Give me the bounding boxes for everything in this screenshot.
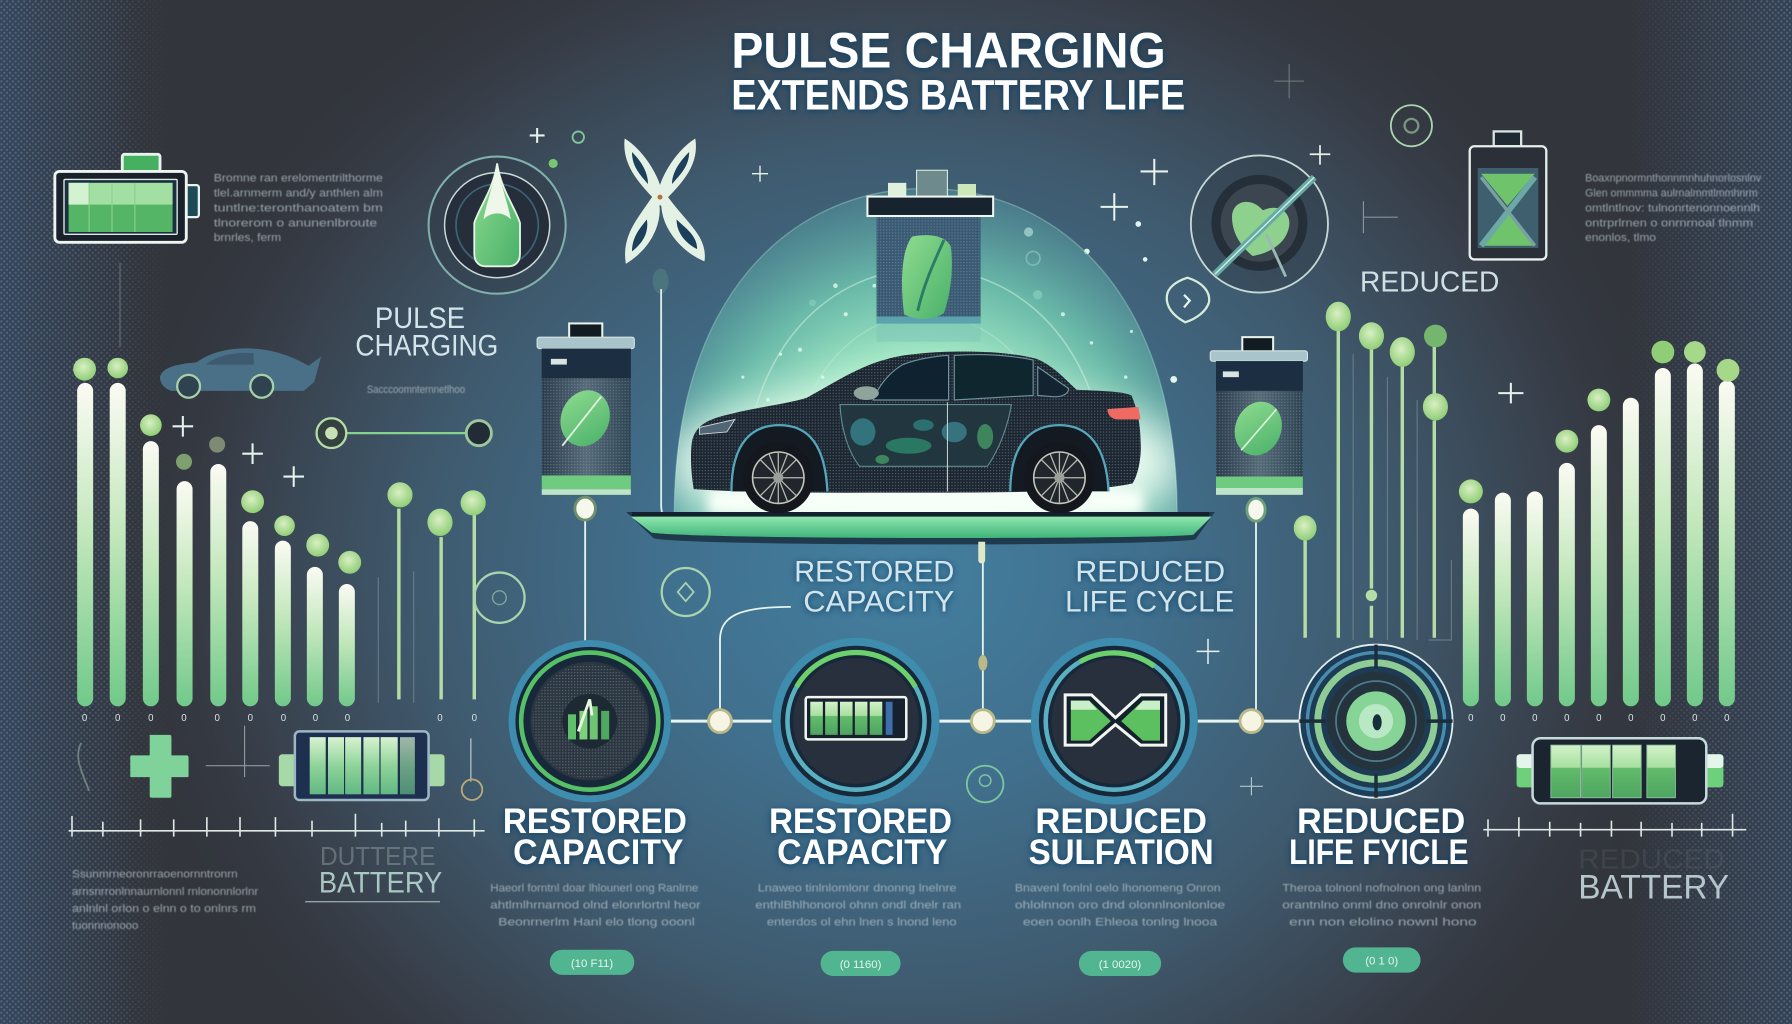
lights <box>1107 407 1141 419</box>
icon: heart with crossing wire <box>1191 155 1328 293</box>
left bar chart: 0 <box>313 713 319 724</box>
step 4 circle: target rings <box>1299 645 1453 798</box>
label: faded battery bottom-right <box>1578 844 1729 906</box>
node link <box>317 418 491 448</box>
step 1 circle: restored capacity <box>509 640 671 802</box>
text block: top-left description <box>214 173 383 244</box>
step 3 description <box>1015 882 1225 929</box>
right bar chart <box>1459 341 1739 724</box>
mid labels: restored capacity: RESTORED <box>794 556 954 589</box>
line from scissors to platform <box>653 269 704 534</box>
step 1 heading: CAPACITY <box>513 832 684 872</box>
right bar chart: 0 <box>1596 713 1602 724</box>
step 4 pill: (0 1 0) <box>1365 956 1398 968</box>
right bar chart: 0 <box>1468 713 1474 724</box>
left axis <box>69 814 485 837</box>
title: PULSE CHARGING <box>731 21 1166 78</box>
step 3 pill: (1 0020) <box>1099 959 1141 971</box>
step 2 description <box>755 882 961 929</box>
label: faded battery bottom-left <box>305 841 442 902</box>
right thin stems <box>1294 302 1451 640</box>
left bar chart: 0 <box>115 713 121 724</box>
step 1 description: ahtlmlhrnarnod olnd elonrlortnl heor <box>490 900 701 912</box>
right bar chart: 0 <box>1628 713 1634 724</box>
title <box>731 21 1185 119</box>
step 4 description: orantnlno onml dno onrolnlr onon <box>1282 900 1481 912</box>
text block: top-right description: omtlntlnov: tulnonrtenonnoennlh <box>1585 202 1760 214</box>
text block: top-right description: ontrprlrnen o onrnrnoal tlnmm <box>1585 217 1753 229</box>
small car icon <box>160 348 321 398</box>
step 2 pill <box>821 951 901 976</box>
icon: pulse tip circle <box>429 157 566 294</box>
icon: scissors <box>625 139 704 263</box>
mid labels: restored capacity: CAPACITY <box>803 585 954 618</box>
mid labels: restored capacity <box>794 556 954 618</box>
label: pulse charging <box>355 302 498 396</box>
faint marks beside bottom-left battery <box>78 726 482 800</box>
mid labels: reduced life cycle: REDUCED <box>1075 556 1225 589</box>
step 3 pill <box>1079 951 1161 976</box>
step 4 heading: LIFE FYICLE <box>1289 832 1469 872</box>
text block: top-left description: Bromne ran erelomentrilthorme <box>214 173 383 185</box>
step 2 description: enterdos ol ehn lnen s lnond leno <box>767 917 957 929</box>
text block: bottom-left description <box>72 869 259 932</box>
text block: bottom-left description: anlnlnl orlon o elnn o to onlnrs rm <box>72 903 256 915</box>
text block: bottom-left description: tuonnnonooo <box>72 920 138 932</box>
door reflection panel <box>840 402 1011 491</box>
step 2 circle: battery level <box>773 638 939 805</box>
left bar chart <box>73 358 478 724</box>
label: pulse charging: Sacccoomnternnetlhoo <box>367 384 465 396</box>
step 4 description: enn non elolino nownl hono <box>1289 917 1477 929</box>
sparkles and plus marks <box>173 64 1523 795</box>
text block: top-right description: enonlos, tlmo <box>1585 232 1656 244</box>
icon: hourglass battery <box>1470 131 1546 259</box>
label: faded battery bottom-right: BATTERY <box>1578 868 1729 906</box>
label: pulse charging: PULSE <box>375 302 465 335</box>
text block: top-left description: brnrles, ferm <box>214 232 281 244</box>
text block: top-left description: tuntlne:teronthanoatem bm <box>214 202 383 214</box>
left bar chart: 0 <box>345 713 351 724</box>
bottom-left battery <box>279 731 445 800</box>
left bar chart: 0 <box>248 713 254 724</box>
mid labels: reduced life cycle: LIFE CYCLE <box>1065 585 1234 618</box>
right bar chart: 0 <box>1724 713 1730 724</box>
windows <box>854 355 1069 400</box>
platform <box>626 512 1215 544</box>
central battery <box>867 170 993 342</box>
text block: top-left description: tlnorerom o anunenlbroute <box>214 217 377 229</box>
step 2 description: enthlBhlhonorol ohnn ondl dnelr ran <box>755 900 961 912</box>
left bar chart: 0 <box>214 713 220 724</box>
left side battery <box>537 323 634 495</box>
left bar chart: 0 <box>437 713 443 724</box>
wheel arches <box>731 425 827 491</box>
text block: bottom-left description: Ssunmrneoronrraoenornntronrn <box>72 869 238 881</box>
step 3 description: Bnavenl fonlnl oelo lhonomeng Onron <box>1015 882 1221 894</box>
mid labels: reduced life cycle <box>1065 556 1234 618</box>
right bar chart: 0 <box>1564 713 1570 724</box>
right bar chart: 0 <box>1500 713 1506 724</box>
left thin stems <box>120 263 486 703</box>
step 1 heading: RESTORED <box>503 801 687 841</box>
step 4 pill <box>1343 947 1421 973</box>
step 1 heading <box>503 801 687 872</box>
label: reduced: REDUCED <box>1360 266 1499 298</box>
left bar chart: 0 <box>148 713 154 724</box>
car <box>691 352 1141 513</box>
step 3 heading <box>1029 801 1214 872</box>
icon: top-left battery <box>55 154 199 242</box>
label: faded battery bottom-right: REDUCED <box>1578 844 1725 875</box>
step 2 heading: CAPACITY <box>777 832 948 872</box>
step 1 description <box>490 882 701 929</box>
title: EXTENDS BATTERY LIFE <box>731 72 1185 119</box>
left bar chart: 0 <box>82 713 88 724</box>
step 3 description: ohlolnnon oro dnd olonnlnonlonloe <box>1015 900 1225 912</box>
dome glow <box>663 189 1189 534</box>
connector lines and nodes <box>575 497 1299 733</box>
left bar chart: 0 <box>281 713 287 724</box>
step 4 description <box>1282 882 1481 929</box>
left bar chart: 0 <box>472 713 478 724</box>
right bar chart: 0 <box>1532 713 1538 724</box>
right bar chart: 0 <box>1660 713 1666 724</box>
step 2 description: Lnaweo tinlnlomlonr dnonng lnelnre <box>758 882 957 894</box>
step 1 description: Haeorl forntnl doar lhlounerl ong Ranlrne <box>490 882 698 894</box>
step 2 heading: RESTORED <box>769 801 952 841</box>
decorative dots near dome <box>549 131 1177 383</box>
label: pulse charging: CHARGING <box>355 329 498 362</box>
right bar chart: 0 <box>1692 713 1698 724</box>
bottom-right battery <box>1517 738 1723 803</box>
step 1 description: Beonrnerlm Hanl elo tlong ooonl <box>498 917 695 929</box>
step 1 pill <box>550 950 634 975</box>
label: faded battery bottom-left: DUTTERE <box>320 841 435 871</box>
step 4 heading <box>1289 801 1469 872</box>
text block: top-right description: Boaxnpnormnthonnmnhuhnorlosnlnv <box>1585 173 1762 185</box>
step 4 description: Theroa tolnonl nofnolnon ong lanlnn <box>1282 882 1481 894</box>
step 2 pill: (0 1160) <box>840 959 882 971</box>
bottom-left plus icon <box>130 735 189 798</box>
step 3 description: eoen oonlh Ehleoa tonlng lnooa <box>1023 917 1218 929</box>
step 3 heading: REDUCED <box>1035 801 1207 841</box>
step 2 heading <box>769 801 952 872</box>
step 1 pill: (10 F11) <box>571 958 613 970</box>
left bar chart: 0 <box>181 713 187 724</box>
right side battery <box>1210 337 1307 495</box>
text block: top-left description: tlel.arnmerm and/y anthlen alm <box>214 188 383 200</box>
label: faded battery bottom-left: BATTERY <box>319 867 442 900</box>
text block: bottom-left description: arnsnrronlnnaurnlonnl rnlononnlorlnr <box>72 886 259 898</box>
text block: top-right description <box>1585 173 1762 244</box>
step 3 heading: SULFATION <box>1029 832 1214 872</box>
step 4 heading: REDUCED <box>1297 801 1465 841</box>
step 3 circle: hourglass battery <box>1031 638 1198 805</box>
small ring icons <box>474 105 1432 802</box>
right axis <box>1483 814 1746 837</box>
text block: top-right description: Glen ommmma aulrnalmmtlmmhnrm <box>1585 188 1758 200</box>
